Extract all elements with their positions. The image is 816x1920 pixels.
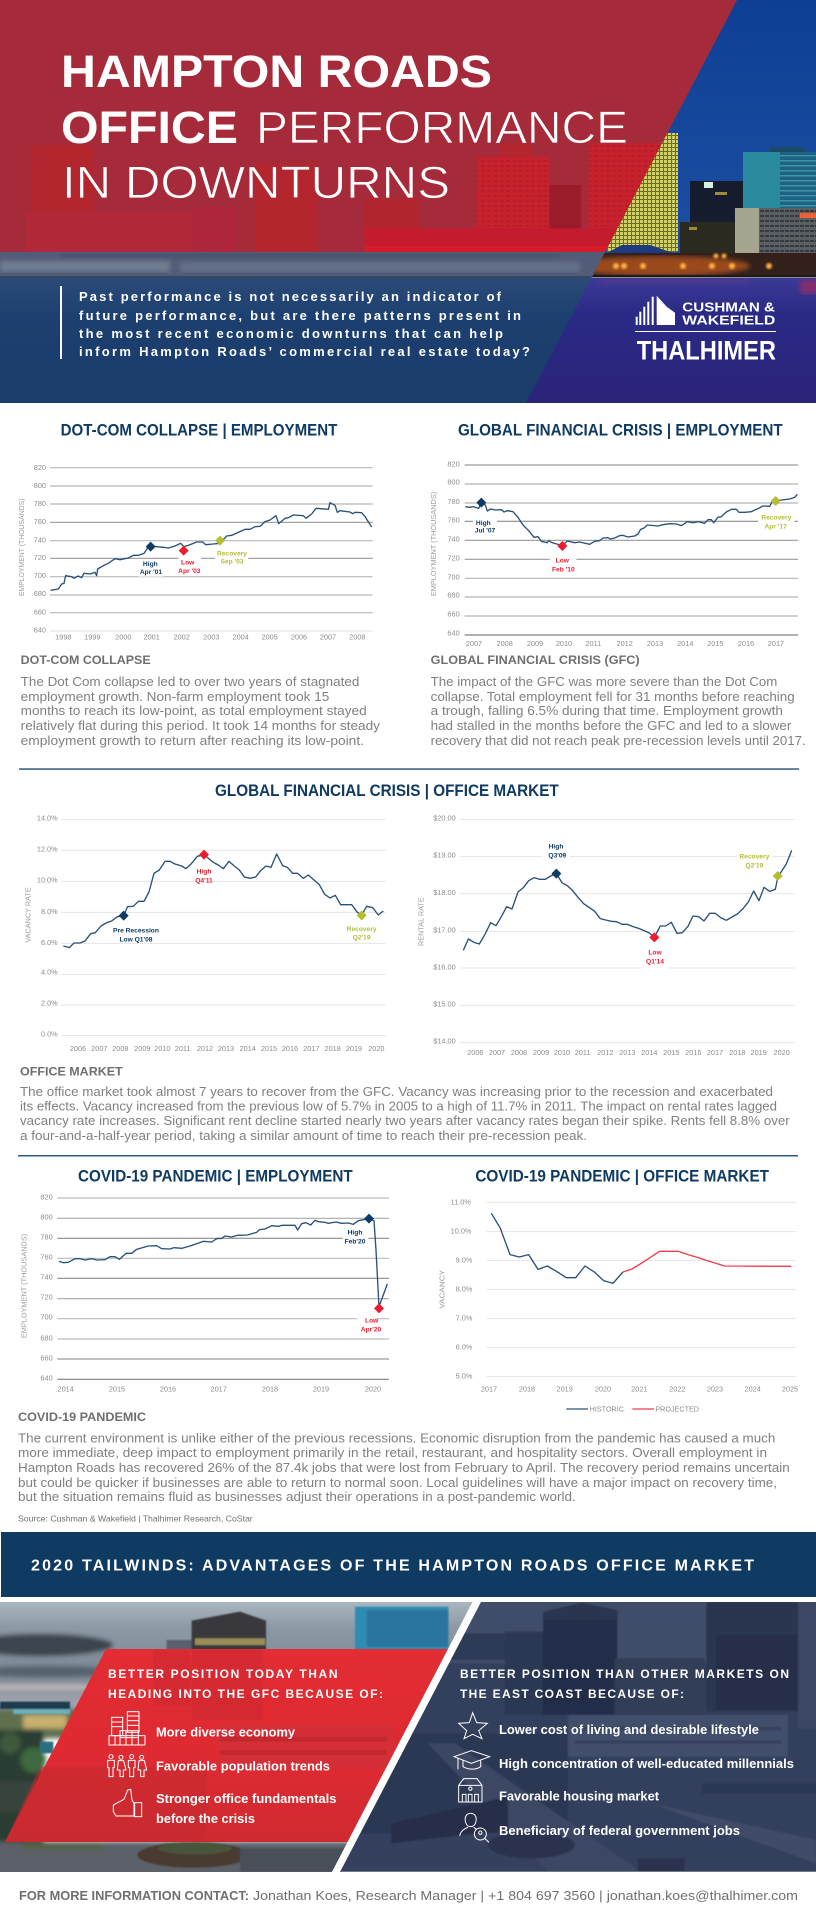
line chart: employment 1998-2008: Apr '01 xyxy=(140,569,162,576)
line chart: employment 2007-2017: 2016 xyxy=(738,639,754,648)
line chart: employment 2007-2017: 800 xyxy=(447,478,460,487)
line chart: vacancy 2017-2025: 2023 xyxy=(707,1385,723,1394)
line chart: employment 1998-2008 xyxy=(17,463,373,642)
line chart: employment 1998-2008: 2007 xyxy=(320,633,336,642)
line chart: employment 2014-2020: 2016 xyxy=(160,1385,176,1394)
line chart: vacancy 2017-2025: VACANCY xyxy=(438,1270,447,1309)
panel: better position today than GFC xyxy=(0,1602,472,1872)
line chart: employment 2007-2017: 2007 xyxy=(466,639,482,648)
text block: covid-19 pandemic: more immediate, deep impact to employment primarily in the retail, restaurant, and hospitality sectors. Overall employment in xyxy=(18,1445,767,1460)
line chart: employment 2007-2017: 2015 xyxy=(707,639,723,648)
line chart: vacancy 2017-2025: 2024 xyxy=(745,1385,761,1394)
chart: vacancy rate: 8.0% xyxy=(41,907,58,916)
line chart: employment 2007-2017: 780 xyxy=(447,497,460,506)
text block: covid-19 pandemic: but could be quicker if businesses are able to return to normal soon. Local guidelines will have a major impact on recovery time, xyxy=(18,1475,777,1490)
text block: covid-19 pandemic: COVID-19 PANDEMIC xyxy=(18,1410,146,1424)
line chart: employment 2007-2017 xyxy=(429,460,798,648)
line chart: employment 2014-2020: 820 xyxy=(40,1193,53,1202)
icon: person with magnifier xyxy=(460,1813,489,1842)
text: more diverse economy: More diverse economy xyxy=(156,1726,295,1740)
chart: vacancy rate: 6.0% xyxy=(41,938,58,947)
text block: covid-19 pandemic: but the situation remains fluid as businesses adjust their operations in a post-pandemic world. xyxy=(18,1489,576,1504)
line chart: employment 2014-2020: Low xyxy=(365,1318,379,1325)
line chart: employment 1998-2008: 740 xyxy=(34,535,46,544)
panel heading: BETTER POSITION THAN OTHER MARKETS ON xyxy=(460,1667,789,1681)
text block: office market: OFFICE MARKET xyxy=(20,1064,123,1078)
line chart: employment 1998-2008: Apr '03 xyxy=(178,568,201,575)
line chart: employment 1998-2008: 2005 xyxy=(262,633,278,642)
text: favorable population trends: Favorable population trends xyxy=(156,1760,330,1774)
chart: rental rate: Q2'19 xyxy=(745,862,764,869)
line chart: employment 2014-2020: Feb'20 xyxy=(345,1239,366,1246)
text block: office market: The office market took almost 7 years to recover from the GFC. Vacancy was increasing prior to the recession and exacerbated xyxy=(20,1084,773,1099)
chart: rental rate: 2014 xyxy=(641,1048,657,1057)
logo: Cushman & Wakefield Thalhimer xyxy=(635,296,776,365)
chart: rental rate: $16.00 xyxy=(433,963,456,972)
text block: covid-19 pandemic xyxy=(18,1410,790,1504)
chart: vacancy rate: 2009 xyxy=(134,1044,150,1053)
chart: rental rate: 2012 xyxy=(597,1048,613,1057)
chart: rental rate: 2007 xyxy=(489,1048,505,1057)
text: favorable housing market: Favorable housing market xyxy=(499,1790,660,1804)
icon: thumbs up xyxy=(113,1789,142,1817)
intro text with side rule: Past performance is not necessarily an indicator of xyxy=(79,289,502,304)
white diagonal divider xyxy=(332,1601,481,1872)
line chart: employment 2014-2020: 800 xyxy=(40,1213,53,1222)
panel: dot-com collapse employment xyxy=(17,420,381,748)
panel heading xyxy=(108,1667,383,1701)
line chart: employment 2007-2017: Feb '10 xyxy=(552,567,575,574)
chart: rental rate: 2018 xyxy=(729,1048,745,1057)
line chart: vacancy 2017-2025: 8.0% xyxy=(456,1285,473,1294)
icon: city buildings xyxy=(109,1712,145,1745)
line chart: employment 2014-2020: 700 xyxy=(40,1313,53,1322)
line chart: vacancy 2017-2025: 10.0% xyxy=(451,1227,472,1236)
line chart: employment 2007-2017: EMPLOYMENT (THOUSANDS) xyxy=(429,492,438,596)
line chart: employment 2007-2017: 820 xyxy=(447,460,460,469)
line chart: employment 2014-2020: Apr'20 xyxy=(361,1327,382,1334)
footer contact line: FOR MORE INFORMATION CONTACT: xyxy=(19,1888,249,1903)
line chart: vacancy 2017-2025 xyxy=(438,1198,798,1414)
chart: rental rate: 2019 xyxy=(751,1048,767,1057)
chart: rental rate: $19.00 xyxy=(433,851,456,860)
chart: vacancy rate: 2016 xyxy=(282,1044,298,1053)
line chart: vacancy 2017-2025: 6.0% xyxy=(456,1343,473,1352)
icon: house xyxy=(459,1779,482,1802)
text: federal government jobs: Beneficiary of federal government jobs xyxy=(499,1824,740,1838)
chart: vacancy rate: 14.0% xyxy=(37,814,58,823)
line chart: employment 2007-2017: 2009 xyxy=(527,639,543,648)
chart: rental rate: 2016 xyxy=(685,1048,701,1057)
line chart: employment 1998-2008: 820 xyxy=(34,463,46,472)
line chart: employment 2007-2017: 720 xyxy=(447,554,460,563)
line chart: vacancy 2017-2025: PROJECTED xyxy=(655,1405,699,1414)
line chart: employment 1998-2008: 2004 xyxy=(233,633,249,642)
banner: 2020 tailwinds: 2020 TAILWINDS: ADVANTAGES OF THE HAMPTON ROADS OFFICE MARKET xyxy=(31,1558,754,1575)
chart: vacancy rate: 2.0% xyxy=(41,999,58,1008)
line chart: vacancy 2017-2025: 5.0% xyxy=(456,1372,473,1381)
chart: vacancy rate: VACANCY RATE xyxy=(24,887,33,943)
chart: rental rate: Recovery xyxy=(739,854,770,861)
line chart: employment 2014-2020: 2019 xyxy=(313,1385,329,1394)
line chart: employment 2007-2017: Low xyxy=(556,558,570,565)
logo: Cushman & Wakefield Thalhimer: CUSHMAN & xyxy=(682,300,775,315)
panel heading: BETTER POSITION TODAY THAN xyxy=(108,1667,338,1681)
panel heading: THE EAST COAST BECAUSE OF: xyxy=(460,1687,684,1701)
icon: graduation cap xyxy=(454,1751,490,1769)
line chart: employment 2014-2020: 680 xyxy=(40,1334,53,1343)
panel: covid-19 office market xyxy=(438,1166,798,1414)
line chart: vacancy 2017-2025: 2025 xyxy=(782,1385,798,1394)
body text: months to reach its low-point, as total employment stayed xyxy=(21,703,367,718)
chart: rental rate: Low xyxy=(648,950,662,957)
line chart: employment 2007-2017: 740 xyxy=(447,535,460,544)
chart: vacancy rate xyxy=(24,814,386,1053)
line chart: employment 2014-2020: 2017 xyxy=(211,1385,227,1394)
chart: vacancy rate: Q2'19 xyxy=(353,935,371,942)
panel: global financial crisis employment xyxy=(429,420,806,748)
chart: rental rate: 2013 xyxy=(619,1048,635,1057)
chart: vacancy rate: 2013 xyxy=(218,1044,234,1053)
chart: vacancy rate: 2014 xyxy=(240,1044,256,1053)
line chart: employment 2014-2020: 2020 xyxy=(365,1385,381,1394)
line chart: vacancy 2017-2025: HISTORIC xyxy=(590,1405,625,1414)
chart: vacancy rate: Pre Recession xyxy=(113,928,159,935)
line chart: employment 1998-2008: High xyxy=(143,561,158,568)
chart: vacancy rate: Q4'11 xyxy=(195,878,213,885)
text: well-educated millennials: High concentration of well-educated millennials xyxy=(499,1757,794,1771)
body text xyxy=(431,674,806,748)
line chart: employment 2007-2017: 640 xyxy=(447,629,460,638)
chart title: COVID-19 PANDEMIC | OFFICE MARKET xyxy=(475,1166,769,1185)
line chart: employment 1998-2008: Low xyxy=(181,560,195,567)
line chart: employment 1998-2008: 760 xyxy=(34,517,46,526)
body text xyxy=(21,674,381,748)
section heading: DOT-COM COLLAPSE xyxy=(21,653,151,667)
text block: covid-19 pandemic: Hampton Roads has recovered 26% of the 87.4k jobs that were lost from February to April. The recovery period remains uncertain xyxy=(18,1460,790,1475)
header overlay: red sky and tinted water xyxy=(0,0,760,403)
text block: office market: a four-and-a-half-year period, taking a similar amount of time to reach their pre-recession peak. xyxy=(20,1128,587,1143)
icon: population xyxy=(108,1755,147,1777)
chart: rental rate: Q3'09 xyxy=(548,853,567,860)
chart: rental rate: $17.00 xyxy=(433,926,456,935)
title: HAMPTON ROADS xyxy=(61,46,492,97)
body text: The impact of the GFC was more severe than the Dot Com xyxy=(431,674,777,689)
chart: rental rate: 2010 xyxy=(554,1048,570,1057)
line chart: employment 1998-2008: 680 xyxy=(34,589,46,598)
chart: vacancy rate: 2015 xyxy=(261,1044,277,1053)
body text: had stalled in the months before the GFC and led to a slower xyxy=(431,718,792,733)
line chart: vacancy 2017-2025: 7.0% xyxy=(456,1314,473,1323)
title: OFFICE xyxy=(61,102,238,153)
chart: rental rate: 2017 xyxy=(707,1048,723,1057)
line chart: employment 2007-2017: 700 xyxy=(447,573,460,582)
line chart: employment 1998-2008: 2000 xyxy=(115,633,131,642)
title: PERFORMANCE xyxy=(256,102,628,153)
text: stronger office fundamentals: Stronger office fundamentals xyxy=(156,1792,336,1806)
chart: vacancy rate: 2018 xyxy=(325,1044,341,1053)
chart: vacancy rate: 0.0% xyxy=(41,1030,58,1039)
line chart: employment 2014-2020: 2014 xyxy=(58,1385,74,1394)
line chart: employment 1998-2008: 640 xyxy=(34,626,46,635)
panel: covid-19 employment xyxy=(19,1166,389,1394)
chart title: COVID-19 PANDEMIC | EMPLOYMENT xyxy=(78,1166,353,1185)
photo: downtown aerial view xyxy=(0,1602,472,1872)
body text: The Dot Com collapse led to over two years of stagnated xyxy=(21,674,359,689)
line chart: employment 1998-2008: 720 xyxy=(34,553,46,562)
line chart: employment 2014-2020: 720 xyxy=(40,1293,53,1302)
red panel ghosted buildings xyxy=(5,1650,393,1842)
chart: rental rate: RENTAL RATE xyxy=(417,897,426,946)
photo: navy tinted downtown xyxy=(340,1602,816,1872)
line chart: employment 1998-2008: 780 xyxy=(34,499,46,508)
text block: office market: its effects. Vacancy increased from the previous low of 5.7% in 2005 to a high of 11.7% in 2011. The impact on rental rates lagged xyxy=(20,1099,777,1114)
chart: vacancy rate: 2007 xyxy=(91,1044,107,1053)
body text: a trough, falling 6.5% during that time. Employment growth xyxy=(431,703,783,718)
line chart: employment 1998-2008: 2008 xyxy=(349,633,365,642)
line chart: employment 1998-2008: 2001 xyxy=(144,633,160,642)
chart: rental rate: $20.00 xyxy=(433,814,456,823)
line chart: employment 2007-2017: 680 xyxy=(447,591,460,600)
logo: Cushman & Wakefield Thalhimer: WAKEFIELD xyxy=(682,312,775,328)
chart: rental rate: 2015 xyxy=(663,1048,679,1057)
chart: rental rate: $15.00 xyxy=(433,1000,456,1009)
body text: recovery that did not reach peak pre-recession levels until 2017. xyxy=(431,733,806,748)
body text: collapse. Total employment fell for 31 months before reaching xyxy=(431,689,795,704)
line chart: vacancy 2017-2025: 2018 xyxy=(519,1385,535,1394)
line chart: employment 2007-2017: 2010 xyxy=(556,639,572,648)
line chart: vacancy 2017-2025: 2017 xyxy=(481,1385,497,1394)
text: stronger office fundamentals: before the crisis xyxy=(156,1812,255,1826)
chart: vacancy rate: 2008 xyxy=(112,1044,128,1053)
line chart: employment 2007-2017: 2012 xyxy=(617,639,633,648)
line chart: employment 2014-2020: 640 xyxy=(40,1374,53,1383)
chart: vacancy rate: 2010 xyxy=(154,1044,170,1053)
line chart: employment 2007-2017: Recovery xyxy=(761,515,792,522)
body text: employment growth to return after reaching its low-point. xyxy=(21,733,364,748)
chart: rental rate: 2009 xyxy=(533,1048,549,1057)
text block: office market xyxy=(20,1064,790,1143)
chart: rental rate: $18.00 xyxy=(433,888,456,897)
line chart: employment 2014-2020: 780 xyxy=(40,1233,53,1242)
line chart: vacancy 2017-2025: 11.0% xyxy=(451,1198,471,1207)
line chart: employment 1998-2008: 660 xyxy=(34,608,46,617)
chart: vacancy rate: 2020 xyxy=(368,1044,384,1053)
line chart: employment 2014-2020: 740 xyxy=(40,1273,53,1282)
chart title: DOT-COM COLLAPSE | EMPLOYMENT xyxy=(61,420,337,439)
intro text with side rule: the most recent economic downturns that can help xyxy=(79,326,503,341)
line chart: employment 2007-2017: 2013 xyxy=(647,639,663,648)
panel: better position than east coast markets xyxy=(340,1602,816,1872)
line chart: employment 2014-2020: High xyxy=(348,1230,362,1237)
line chart: employment 1998-2008: 2006 xyxy=(291,633,307,642)
chart: rental rate: 2006 xyxy=(467,1048,483,1057)
line chart: employment 1998-2008: 800 xyxy=(34,481,46,490)
body text: employment growth. Non-farm employment took 15 xyxy=(21,689,329,704)
title xyxy=(63,55,626,198)
line chart: employment 2014-2020: 660 xyxy=(40,1354,53,1363)
chart: rental rate: 2008 xyxy=(511,1048,527,1057)
chart: vacancy rate: 10.0% xyxy=(37,876,58,885)
text: stronger office fundamentals xyxy=(156,1792,336,1826)
chart: vacancy rate: 2006 xyxy=(70,1044,86,1053)
line chart: employment 2007-2017: 2008 xyxy=(497,639,513,648)
title: IN DOWNTURNS xyxy=(62,157,450,208)
section heading: GLOBAL FINANCIAL CRISIS (GFC) xyxy=(431,653,640,667)
text: lower cost of living: Lower cost of living and desirable lifestyle xyxy=(499,1723,759,1737)
line chart: employment 2014-2020: 760 xyxy=(40,1253,53,1262)
chart: vacancy rate: 2011 xyxy=(175,1044,191,1053)
line chart: employment 2007-2017: High xyxy=(476,520,491,527)
line chart: employment 2014-2020: 2015 xyxy=(109,1385,125,1394)
footer contact line xyxy=(19,1888,798,1903)
line chart: employment 2007-2017: 2017 xyxy=(768,639,784,648)
intro text with side rule: future performance, but are there patterns present in xyxy=(79,308,521,323)
source note: Source: Cushman & Wakefield | Thalhimer Research, CoStar xyxy=(18,1514,253,1524)
chart: vacancy rate: High xyxy=(197,869,211,876)
chart: rental rate xyxy=(417,814,795,1057)
intro text with side rule: inform Hampton Roads’ commercial real estate today? xyxy=(79,344,530,359)
line chart: employment 1998-2008: Recovery xyxy=(217,551,247,558)
panel heading: HEADING INTO THE GFC BECAUSE OF: xyxy=(108,1687,383,1701)
red content panel xyxy=(5,1649,448,1842)
heading: GFC office market: GLOBAL FINANCIAL CRISIS | OFFICE MARKET xyxy=(215,781,559,800)
banner: 2020 tailwinds xyxy=(1,1532,816,1597)
line chart: employment 2007-2017: 2014 xyxy=(677,639,693,648)
line chart: vacancy 2017-2025: 2020 xyxy=(595,1385,611,1394)
chart title: GLOBAL FINANCIAL CRISIS | EMPLOYMENT xyxy=(458,420,783,439)
line chart: employment 2007-2017: 760 xyxy=(447,516,460,525)
line chart: employment 1998-2008: 700 xyxy=(34,571,46,580)
line chart: employment 2007-2017: Apr '17 xyxy=(765,524,787,531)
text block: covid-19 pandemic: The current environment is unlike either of the previous recessions. Economic disruption from the pandemic has caused a much xyxy=(18,1431,775,1446)
chart: vacancy rate: 2019 xyxy=(346,1044,362,1053)
chart: rental rate: 2020 xyxy=(774,1048,790,1057)
chart: rental rate: High xyxy=(549,844,563,851)
line chart: employment 2007-2017: Jul '07 xyxy=(475,528,496,535)
line chart: employment 2007-2017: 660 xyxy=(447,610,460,619)
chart: vacancy rate: 2012 xyxy=(197,1044,213,1053)
line chart: vacancy 2017-2025: 9.0% xyxy=(456,1256,473,1265)
line chart: employment 1998-2008: 2002 xyxy=(174,633,190,642)
line chart: employment 2014-2020 xyxy=(19,1193,389,1394)
line chart: employment 1998-2008: 1999 xyxy=(84,633,100,642)
line chart: employment 2014-2020: 2018 xyxy=(262,1385,278,1394)
line chart: vacancy 2017-2025: 2021 xyxy=(631,1385,647,1394)
panel: header xyxy=(0,0,816,403)
intro text with side rule xyxy=(60,286,530,359)
line chart: employment 2007-2017: 2011 xyxy=(585,639,601,648)
line chart: employment 1998-2008: EMPLOYMENT (THOUSANDS) xyxy=(17,498,26,596)
header photo: night skyline and water xyxy=(500,0,816,403)
logo: Cushman & Wakefield Thalhimer: THALHIMER xyxy=(637,335,776,365)
footer contact line: Jonathan Koes, Research Manager | +1 804 697 3560 | jonathan.koes@thalhimer.com xyxy=(253,1888,798,1903)
icon: star xyxy=(459,1713,487,1739)
chart: vacancy rate: Low Q1'08 xyxy=(119,937,153,944)
chart: rental rate: $14.00 xyxy=(433,1037,456,1046)
line chart: vacancy 2017-2025: 2019 xyxy=(557,1385,573,1394)
chart: vacancy rate: 2017 xyxy=(303,1044,319,1053)
line chart: employment 1998-2008: Sep '03 xyxy=(220,559,244,566)
chart: rental rate: 2011 xyxy=(575,1048,591,1057)
line chart: employment 1998-2008: 1998 xyxy=(55,633,71,642)
chart: vacancy rate: Recovery xyxy=(347,926,377,933)
text block: office market: vacancy rate increases. Significant rent decline started nearly two years after vacancy rates began their spike. Rents fell 8.8% over xyxy=(20,1113,790,1128)
chart: rental rate: Q1'14 xyxy=(646,959,664,966)
body text: relatively flat during this period. It took 14 months for steady xyxy=(21,718,381,733)
chart: vacancy rate: 4.0% xyxy=(41,968,58,977)
line chart: employment 1998-2008: 2003 xyxy=(203,633,219,642)
panel heading xyxy=(460,1667,789,1701)
line chart: employment 2014-2020: EMPLOYMENT (THOUSANDS) xyxy=(19,1234,28,1338)
chart: vacancy rate: 12.0% xyxy=(37,845,58,854)
line chart: vacancy 2017-2025: 2022 xyxy=(669,1385,685,1394)
